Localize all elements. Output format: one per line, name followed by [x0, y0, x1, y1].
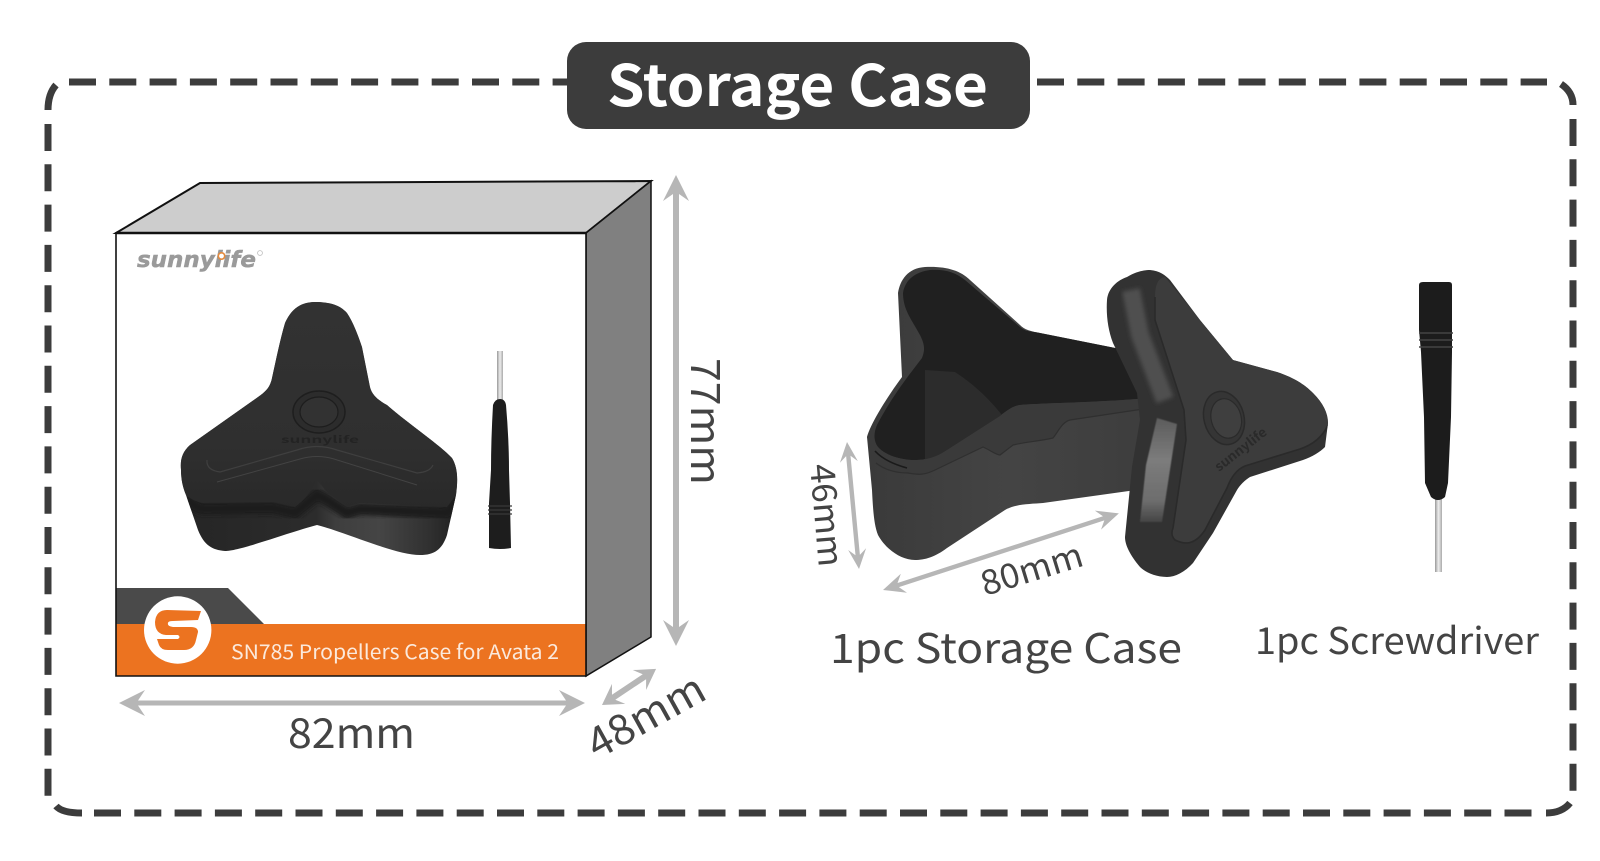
closed storage case: sunnylife	[281, 431, 359, 446]
title badge: Storage Case	[607, 41, 988, 123]
box front face	[116, 233, 586, 676]
lid knob	[1198, 387, 1250, 449]
closed storage case	[181, 302, 458, 555]
label: 46mm: 46mm	[800, 462, 858, 568]
package box	[116, 181, 651, 676]
lid logo: sunnylife	[1210, 422, 1270, 475]
box top face	[116, 181, 651, 233]
S logo badge	[144, 596, 211, 664]
label: 48mm: 48mm	[574, 656, 715, 771]
screwdriver in box	[488, 351, 512, 549]
sunnylife logo: sunnylife	[137, 248, 256, 273]
lid bevel highlight	[1140, 418, 1177, 522]
arrow: box depth	[595, 659, 663, 715]
open storage case	[867, 267, 1150, 560]
label: 80mm: 80mm	[974, 528, 1088, 606]
interior lower lobe	[925, 370, 1002, 460]
arrow: case length	[880, 504, 1122, 600]
dark corner tab	[116, 588, 264, 624]
arrow: case height	[838, 441, 868, 570]
orange band	[116, 624, 586, 676]
rim slot	[875, 451, 907, 468]
caption: screwdriver: 1pc Screwdriver	[1255, 611, 1540, 665]
label: 77mm: 77mm	[679, 358, 739, 485]
arrow: box height	[663, 175, 689, 646]
lid bevel	[1131, 290, 1165, 400]
interior	[874, 270, 1150, 460]
screwdriver	[1419, 282, 1453, 572]
arrow: box width	[119, 690, 585, 716]
box side face	[586, 181, 651, 676]
lid inner face	[1155, 277, 1328, 543]
product name: SN785 Propellers Case for Avata 2	[231, 636, 559, 665]
caption: storage case: 1pc Storage Case	[830, 615, 1182, 675]
case lid	[1107, 270, 1328, 577]
label: 82mm: 82mm	[288, 700, 415, 760]
rim lip	[867, 398, 1150, 474]
box front outline	[116, 233, 586, 676]
outer wall	[867, 267, 1150, 560]
